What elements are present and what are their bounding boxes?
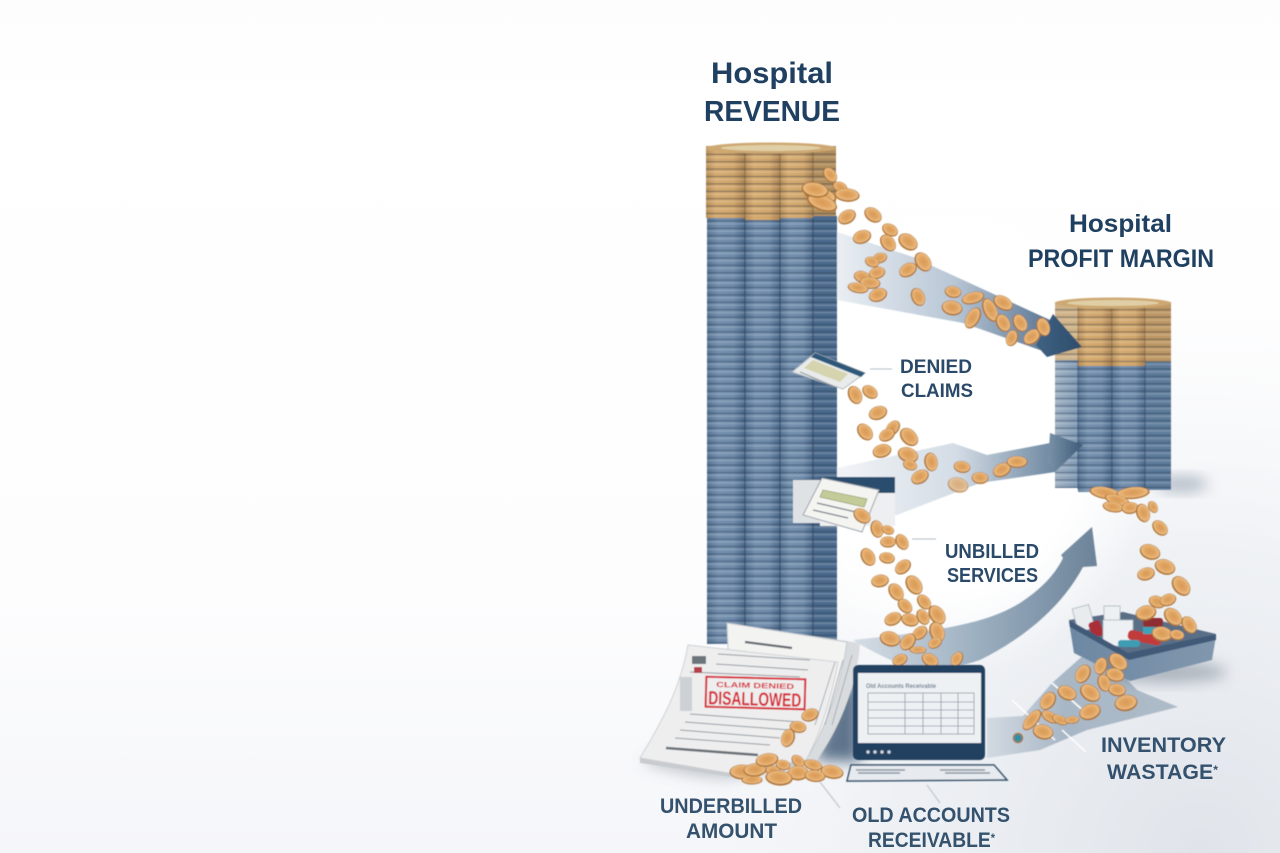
- arrow: inventory shadow band: [987, 645, 1178, 758]
- gold coins section: [706, 142, 836, 220]
- icon: laptop with accounts receivable table: [847, 665, 1007, 781]
- icon: stack of claim documents: [640, 623, 860, 778]
- title: hospital revenue: REVENUE: [704, 96, 840, 128]
- title: hospital profit margin: [1028, 210, 1214, 273]
- label: inventory wastage: [1101, 734, 1226, 784]
- laptop keyboard: [847, 765, 1007, 781]
- falling coins: denied claims to profit: [800, 165, 1053, 348]
- leader lines: [820, 369, 1086, 808]
- label: inventory wastage: *: [1213, 763, 1218, 777]
- arrowhead: [1048, 433, 1083, 472]
- title: hospital revenue: [704, 57, 840, 128]
- label: unbilled services: [945, 541, 1039, 587]
- label: old accounts receivable: [852, 804, 1010, 852]
- icon: denied claim card: [792, 353, 865, 389]
- label: inventory wastage: WASTAGE: [1107, 761, 1212, 784]
- arrowhead: [1036, 314, 1082, 357]
- icon: unbilled service cards: [793, 477, 895, 532]
- gold coins section: [1055, 298, 1171, 366]
- arrow: band from revenue to profit margin (middle): [837, 433, 1083, 520]
- profit margin coin stack: [1055, 298, 1208, 492]
- arrow: curved up arrow: [853, 527, 1097, 668]
- stamp: disallowed: CLAIM DENIED: [716, 680, 795, 691]
- shadow between documents and laptop: [815, 680, 860, 762]
- medicine supplies: [1072, 605, 1163, 647]
- title: hospital profit margin: PROFIT MARGIN: [1028, 245, 1214, 273]
- label: old accounts receivable: RECEIVABLE: [868, 829, 1002, 852]
- icon: laptop with accounts receivable table: Old Accounts Receivable: [866, 684, 937, 690]
- label: unbilled services: UNBILLED: [945, 541, 1039, 563]
- label: old accounts receivable: *: [991, 831, 995, 845]
- document text lines: [666, 642, 852, 755]
- bin walls: [1069, 622, 1216, 681]
- illustration: [640, 142, 1227, 808]
- blue coins section: [707, 216, 837, 644]
- label: unbilled services: SERVICES: [947, 565, 1038, 587]
- label: inventory wastage: INVENTORY: [1101, 734, 1226, 757]
- label: underbilled amount: [660, 795, 802, 843]
- label: old accounts receivable: OLD ACCOUNTS: [852, 804, 1010, 827]
- coins: dropping from profit stack into bin: [1088, 484, 1194, 600]
- label: denied claims: DENIED: [900, 356, 972, 378]
- arrow: band from revenue to profit margin (top): [837, 232, 1082, 357]
- icon: medicine bin: [1069, 591, 1227, 683]
- label: underbilled amount: UNDERBILLED: [660, 795, 802, 818]
- coins: underbilled pile: [729, 706, 845, 787]
- coins: inventory wastage spill: [1014, 650, 1139, 742]
- blue coins section: [1055, 358, 1171, 492]
- revenue coin stack: [706, 142, 837, 644]
- label: denied claims: CLAIMS: [901, 380, 973, 402]
- stamp: disallowed: DISALLOWED: [708, 688, 802, 712]
- label: underbilled amount: AMOUNT: [686, 820, 777, 843]
- title: hospital revenue: Hospital: [711, 57, 833, 90]
- label: denied claims: [900, 356, 973, 402]
- falling coins: unbilled stream: [845, 382, 1028, 495]
- title: hospital profit margin: Hospital: [1069, 210, 1172, 238]
- stamp: disallowed: [706, 677, 805, 712]
- falling coins: lower stream: [850, 505, 966, 670]
